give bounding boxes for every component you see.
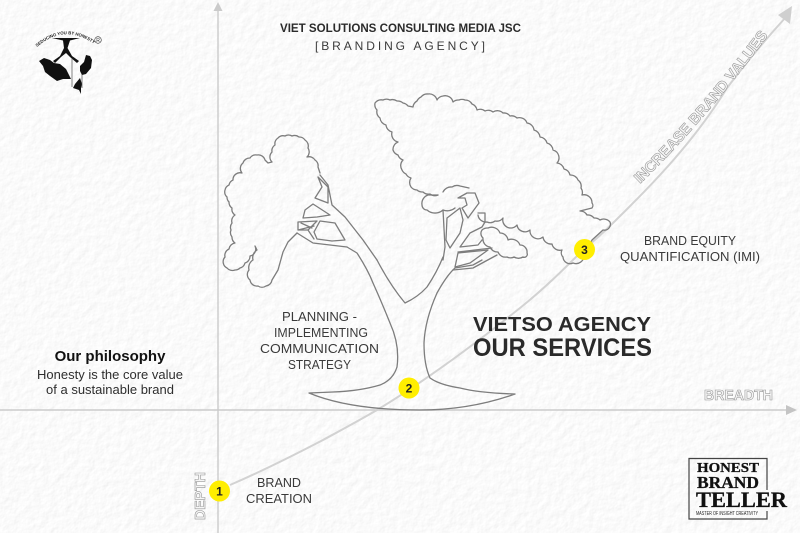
label: brand equity quantification: QUANTIFICATION (IMI) bbox=[620, 249, 760, 264]
axis: depth (vertical) bbox=[214, 2, 222, 533]
numbered step 1 bbox=[209, 480, 230, 502]
label: planning, implementing communication strategy: PLANNING - bbox=[282, 309, 357, 324]
logo inverted tree bbox=[39, 38, 92, 94]
logo: honest brand teller: HONEST bbox=[697, 461, 760, 476]
logo: seducing you by honesty bbox=[36, 31, 102, 94]
logo: honest brand teller: TELLER bbox=[696, 487, 788, 512]
heading: vietso agency our services: VIETSO AGENCY bbox=[473, 314, 652, 336]
logo registered mark: R bbox=[96, 38, 100, 44]
numbered step 3: 3 bbox=[581, 243, 588, 257]
label: brand equity quantification: BRAND EQUITY bbox=[644, 233, 736, 248]
tree: left canopy bbox=[223, 135, 320, 287]
tree illustration bbox=[223, 94, 610, 410]
company title: [BRANDING AGENCY] bbox=[315, 39, 485, 53]
outlined label: increase brand values: INCREASE BRAND VALUES bbox=[633, 30, 767, 184]
text block: our philosophy: Our philosophy bbox=[55, 348, 166, 365]
tree: trunk and base bbox=[309, 247, 515, 410]
label: planning, implementing communication strategy: STRATEGY bbox=[288, 357, 351, 372]
outlined label: depth: DEPTH bbox=[192, 472, 209, 520]
curve: increasing brand values arrow bbox=[230, 6, 792, 485]
label: brand creation: CREATION bbox=[246, 491, 312, 506]
label: planning, implementing communication strategy: COMMUNICATION bbox=[260, 341, 379, 356]
label: brand equity quantification bbox=[620, 233, 760, 264]
label: planning, implementing communication strategy: IMPLEMENTING bbox=[274, 325, 368, 340]
tree: small inner canopy bbox=[422, 185, 469, 213]
tree: large right canopy bbox=[375, 94, 610, 264]
logo: honest brand teller: BRAND bbox=[697, 473, 759, 492]
heading: vietso agency our services bbox=[473, 314, 652, 362]
heading: vietso agency our services: OUR SERVICES bbox=[473, 334, 652, 362]
numbered step 3 bbox=[574, 239, 595, 260]
tree: left branch and cells bbox=[297, 175, 377, 260]
label: planning, implementing communication strategy bbox=[260, 309, 379, 372]
logo tagline: SEDUCING YOU BY HONESTY bbox=[36, 31, 96, 46]
axis: breadth (horizontal) bbox=[0, 405, 797, 415]
company title: VIET SOLUTIONS CONSULTING MEDIA JSC bbox=[280, 21, 521, 35]
text block: our philosophy bbox=[37, 348, 183, 397]
text block: our philosophy: Honesty is the core value bbox=[37, 367, 183, 382]
company title bbox=[280, 21, 521, 53]
outlined label: breadth: BREADTH bbox=[704, 387, 773, 404]
logo: honest brand teller bbox=[689, 458, 788, 519]
numbered step 2 bbox=[398, 378, 420, 398]
logo: honest brand teller: MASTER OF INSIGHT CREATIVITY bbox=[696, 511, 759, 517]
label: brand creation bbox=[246, 475, 312, 506]
tree: small right canopy bbox=[481, 227, 527, 258]
tree: right main branch and cells bbox=[443, 193, 497, 270]
numbered step 1: 1 bbox=[216, 484, 223, 498]
numbered step 2: 2 bbox=[406, 382, 413, 396]
text block: our philosophy: of a sustainable brand bbox=[46, 382, 174, 397]
label: brand creation: BRAND bbox=[257, 475, 301, 490]
